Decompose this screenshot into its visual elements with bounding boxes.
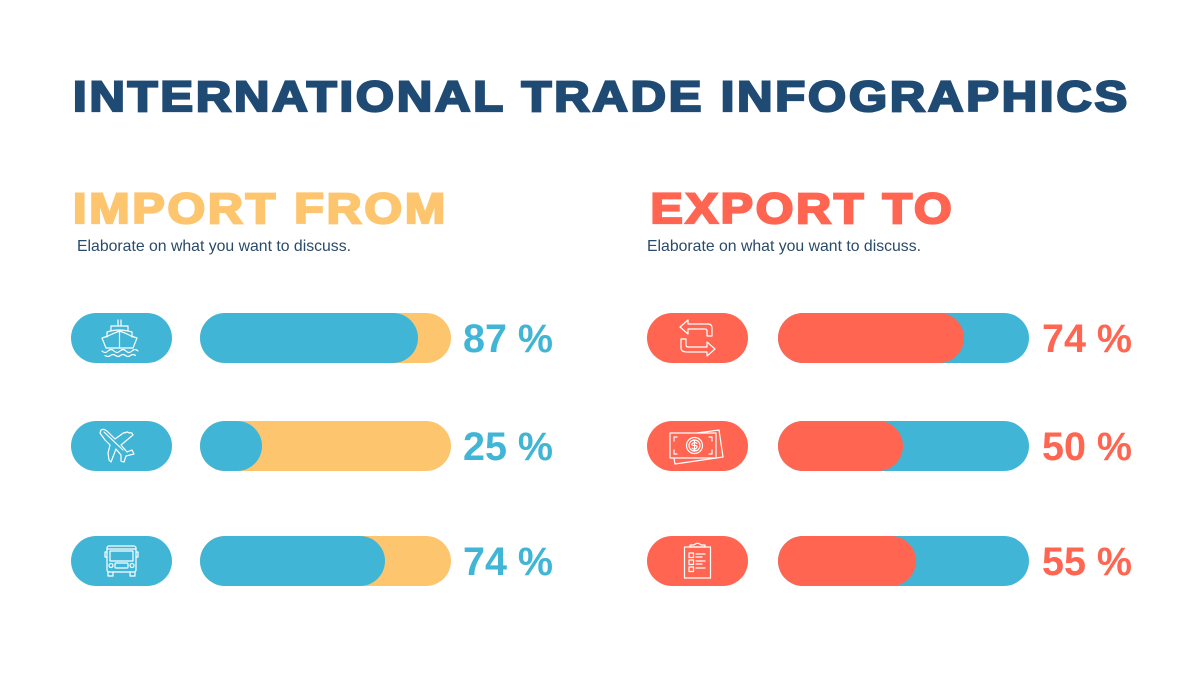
value 87 percent: 87 % bbox=[463, 317, 553, 361]
value 74 percent: 74 % bbox=[463, 540, 553, 584]
row: ship 87 percent bbox=[71, 313, 553, 363]
heading: import from: IMPORT FROM bbox=[73, 185, 448, 233]
value 50 percent: 50 % bbox=[1042, 425, 1132, 469]
title: INTERNATIONAL TRADE INFOGRAPHICS bbox=[73, 73, 1130, 121]
panel: import from bbox=[71, 185, 553, 586]
row: plane 25 percent bbox=[71, 421, 553, 471]
progress bar 87 percent bbox=[200, 313, 451, 363]
value 55 percent: 55 % bbox=[1042, 540, 1132, 584]
row: checklist 55 percent bbox=[647, 536, 1132, 586]
panel: export to bbox=[647, 185, 1132, 586]
icon: truck bbox=[71, 536, 172, 586]
progress bar 50 percent bbox=[778, 421, 1029, 471]
icon: exchange arrows bbox=[647, 313, 748, 363]
icon: plane bbox=[71, 421, 172, 471]
export description: Elaborate on what you want to discuss. bbox=[647, 238, 921, 255]
progress bar 74 percent export bbox=[778, 313, 1029, 363]
value 25 percent: 25 % bbox=[463, 425, 553, 469]
progress bar 55 percent bbox=[778, 536, 1029, 586]
icon: ship bbox=[71, 313, 172, 363]
row: money 50 percent bbox=[647, 421, 1132, 471]
icon: clipboard checklist bbox=[647, 536, 748, 586]
value 74 percent export: 74 % bbox=[1042, 317, 1132, 361]
row: truck 74 percent bbox=[71, 536, 553, 586]
progress bar 74 percent bbox=[200, 536, 451, 586]
import description: Elaborate on what you want to discuss. bbox=[77, 238, 351, 255]
heading: export to: EXPORT TO bbox=[650, 185, 954, 233]
row: exchange 74 percent bbox=[647, 313, 1132, 363]
icon: banknotes bbox=[647, 421, 748, 471]
progress bar 25 percent bbox=[200, 421, 451, 471]
